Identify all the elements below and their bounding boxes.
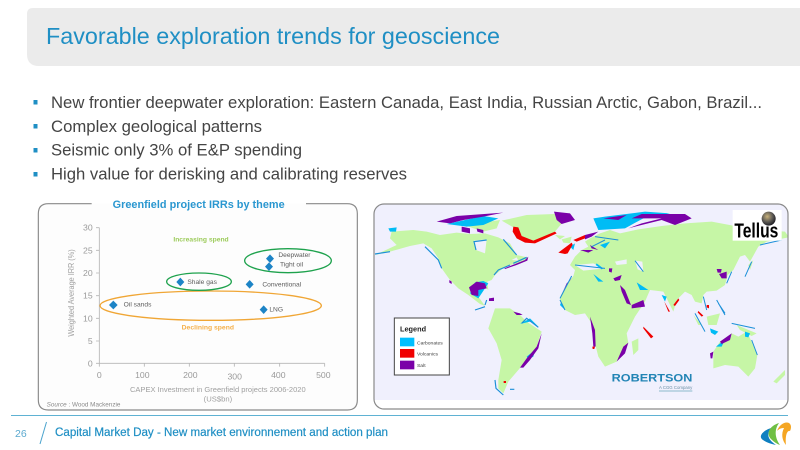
bullet list: New frontier deepwater exploration: Eastern Canada, East India, Russian Arctic, Gabon, Brazil... [51, 93, 762, 112]
ellipse: declining [100, 291, 321, 320]
panel: world map [374, 204, 789, 409]
map legend: Carbonates [417, 340, 443, 346]
x axis tick labels: 300 [227, 371, 242, 381]
ellipse: deepwater and tight oil [245, 249, 331, 273]
map: Eurasia, Africa and Oceania [558, 210, 789, 391]
icon: company logo [761, 422, 791, 445]
point labels: Tight oil [280, 261, 304, 268]
bullet list: Seismic only 3% of E&P spending [51, 140, 302, 160]
y axis tick labels [83, 223, 93, 368]
y axis tick labels: 30 [83, 223, 93, 233]
x axis tick labels: 400 [271, 370, 286, 380]
x axis tick labels: 500 [316, 370, 331, 380]
x axis tick labels: 100 [135, 370, 150, 380]
map: Americas and Greenland [375, 212, 575, 395]
page number: 26 [15, 428, 27, 440]
logo: Tellus: Tellus [734, 219, 778, 242]
point labels: Oil sands [124, 302, 152, 309]
map legend: Legend [400, 325, 426, 334]
y axis tick labels: 5 [88, 336, 93, 346]
map legend [394, 318, 449, 375]
x axis tick labels [97, 370, 331, 381]
point labels: Shale gas [187, 279, 218, 286]
y axis tick labels: 10 [83, 313, 93, 323]
data points [109, 254, 274, 314]
source note: Source : Wood Mackenzie [47, 402, 121, 409]
logo: Robertson [612, 373, 693, 391]
chart axes [96, 228, 325, 367]
logo: Tellus [733, 210, 782, 242]
declining spend note: Declining spend [182, 324, 234, 331]
footer text: Capital Market Day - New market environnement and action plan [55, 427, 388, 439]
title: Favorable exploration trends for geoscience [46, 23, 500, 49]
map legend: Salt [417, 363, 426, 369]
y axis tick labels: 25 [83, 245, 93, 255]
y axis tick labels: 0 [88, 358, 93, 368]
x axis tick labels: 0 [97, 370, 102, 380]
point labels: LNG [269, 307, 283, 314]
bullet list [34, 93, 762, 184]
footer slash [40, 422, 46, 444]
bullet list: Complex geological patterns [51, 117, 262, 136]
spend annotations: Increasing spend [173, 237, 229, 244]
point labels [124, 252, 311, 314]
x axis title: CAPEX Investment in Greenfield projects 2006-2020 [130, 385, 306, 394]
panel: scatter chart [38, 199, 357, 410]
x axis tick labels: 200 [183, 370, 198, 380]
map legend: Volcanics [417, 352, 439, 358]
ellipse: shale gas [167, 273, 231, 290]
header band [27, 8, 800, 66]
bullet list: High value for derisking and calibrating reserves [51, 164, 407, 184]
logo: Robertson: A CGG Company [659, 385, 693, 390]
point labels: Conventional [262, 282, 302, 289]
point labels: Deepwater [278, 252, 311, 259]
logo: Robertson: ROBERTSON [612, 373, 692, 385]
y axis title: Weighted Average IRR (%) [67, 249, 76, 337]
footer rule [11, 414, 788, 416]
chart title: Greenfield project IRRs by theme [113, 199, 285, 211]
y axis tick labels: 20 [83, 268, 93, 278]
x axis unit: (US$bn) [204, 394, 233, 403]
y axis tick labels: 15 [83, 291, 93, 301]
